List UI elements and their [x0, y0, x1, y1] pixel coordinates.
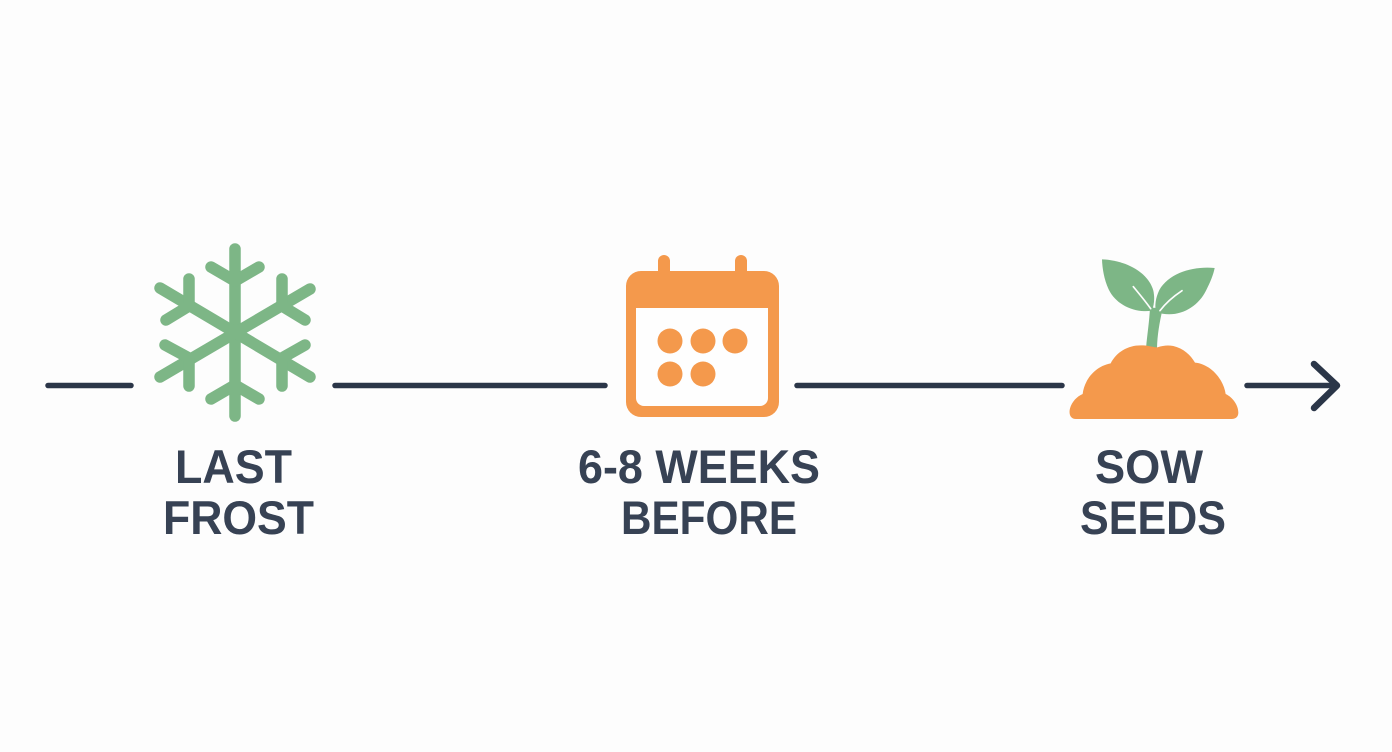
leaf veins [1133, 287, 1182, 311]
right leaf [1155, 268, 1215, 314]
icon: calendar [626, 255, 779, 417]
sprout stem [1146, 307, 1163, 348]
left leaf [1102, 259, 1154, 311]
timeline line segment 1 [48, 383, 131, 388]
timeline line segment 2 [335, 383, 605, 388]
timeline line segment 3 [797, 383, 1062, 388]
label: last frost: LAST [175, 440, 292, 493]
label: 6-8 weeks before: BEFORE [621, 491, 797, 544]
arrow [1247, 364, 1337, 408]
label: sow seeds: SEEDS [1080, 491, 1226, 544]
label: last frost [163, 440, 314, 544]
label: sow seeds [1080, 440, 1226, 544]
icon: sprout in soil [1070, 259, 1238, 419]
label: 6-8 weeks before: 6-8 WEEKS [578, 440, 820, 493]
icon: snowflake [160, 249, 310, 416]
label: last frost: FROST [163, 491, 314, 544]
label: sow seeds: SOW [1095, 440, 1204, 493]
soil mound [1070, 345, 1238, 419]
label: 6-8 weeks before [578, 440, 820, 544]
